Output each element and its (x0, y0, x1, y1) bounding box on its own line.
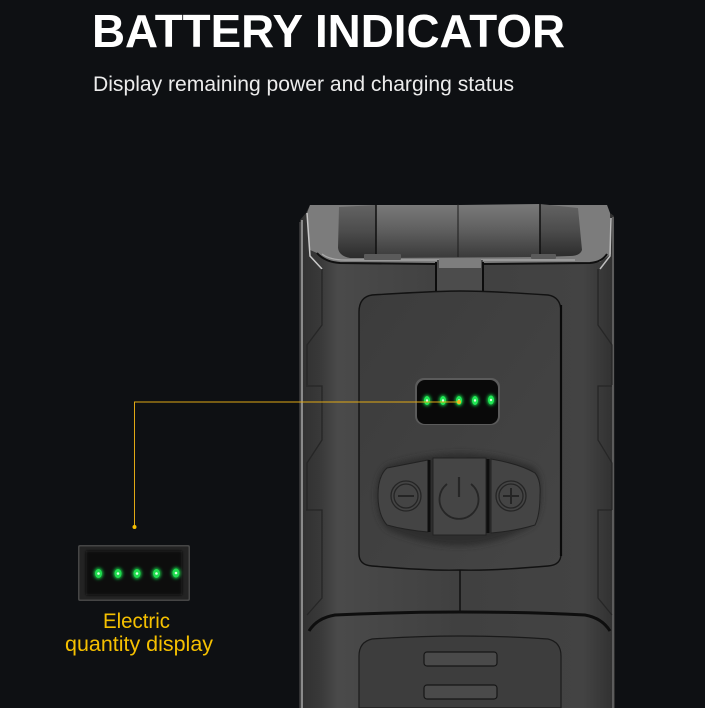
plus icon (496, 481, 526, 511)
callout label: quantity display (65, 633, 213, 656)
button cluster (376, 453, 541, 546)
callout label (65, 610, 213, 656)
upper panel (359, 291, 561, 570)
LED window (415, 378, 500, 425)
LED dots (423, 394, 495, 406)
vent slots (424, 652, 497, 699)
right side grips (598, 269, 612, 615)
minus icon (391, 481, 421, 511)
enlarged LED inset (78, 545, 190, 601)
handle recess (338, 204, 582, 260)
body shell (300, 205, 615, 708)
top grey handle (307, 205, 611, 263)
strap tab (436, 259, 483, 292)
callout leader line (132, 400, 461, 529)
lower section seam (309, 612, 610, 631)
subtitle: Display remaining power and charging status (93, 73, 514, 96)
power icon (440, 477, 478, 519)
inset LED dots (94, 568, 180, 579)
left side grips (306, 269, 322, 615)
lower panel (359, 636, 561, 708)
device body (300, 204, 615, 708)
seam (459, 570, 461, 612)
callout label: Electric (103, 610, 170, 633)
title: BATTERY INDICATOR (92, 5, 565, 57)
